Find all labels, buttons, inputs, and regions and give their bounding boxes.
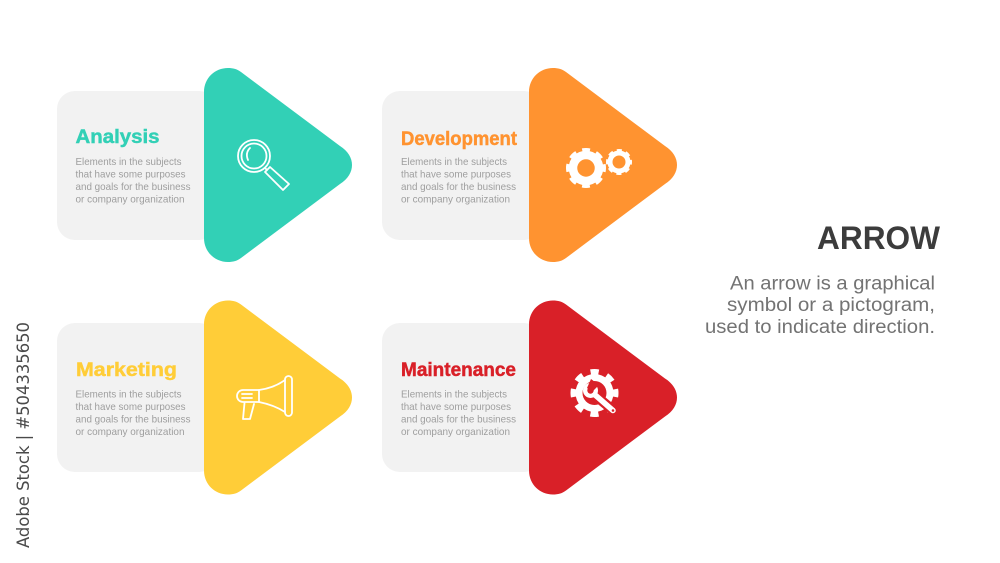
panel: marketing: [57, 300, 352, 494]
marketing description: or company organization: [76, 426, 185, 438]
panel: development: [382, 68, 677, 262]
maintenance heading: Maintenance: [401, 360, 516, 381]
description text: [705, 274, 935, 338]
marketing arrow: [204, 300, 352, 494]
marketing heading: Marketing: [76, 360, 177, 381]
stock image credit: Adobe Stock | #504335650: [14, 322, 34, 548]
development description: Elements in the subjects: [401, 156, 507, 168]
analysis arrow: [204, 68, 352, 262]
analysis description: that have some purposes: [76, 168, 186, 180]
marketing description: and goals for the business: [76, 414, 190, 426]
development card background: [382, 91, 542, 240]
marketing card background: [57, 323, 217, 472]
development heading: Development: [401, 129, 518, 150]
analysis description: [76, 156, 190, 206]
analysis description: and goals for the business: [76, 181, 190, 193]
maintenance arrow: [529, 300, 677, 494]
development description: and goals for the business: [401, 181, 516, 193]
description text: symbol or a pictogram,: [727, 295, 935, 316]
maintenance description: that have some purposes: [401, 401, 511, 413]
marketing description: Elements in the subjects: [76, 388, 182, 400]
marketing description: [76, 388, 190, 438]
panel: analysis: [57, 68, 352, 262]
maintenance description: [401, 388, 516, 438]
development arrow: [529, 68, 677, 262]
development description: [401, 156, 516, 206]
description text: used to indicate direction.: [705, 317, 935, 338]
maintenance description: Elements in the subjects: [401, 388, 507, 400]
panel: maintenance: [382, 300, 677, 494]
icon: gear with wrench: [574, 372, 616, 414]
development description: that have some purposes: [401, 168, 511, 180]
icon: megaphone: [237, 376, 292, 419]
icon: magnifying glass: [238, 140, 289, 190]
analysis description: Elements in the subjects: [76, 156, 182, 168]
analysis heading: Analysis: [76, 127, 160, 148]
analysis card background: [57, 91, 217, 240]
analysis description: or company organization: [76, 194, 185, 206]
marketing description: that have some purposes: [76, 401, 186, 413]
development description: or company organization: [401, 194, 510, 206]
maintenance description: and goals for the business: [401, 414, 516, 426]
description text: An arrow is a graphical: [730, 274, 935, 294]
maintenance description: or company organization: [401, 426, 510, 438]
maintenance card background: [382, 323, 542, 472]
icon: gears: [568, 150, 630, 186]
title: ARROW: [817, 220, 941, 256]
